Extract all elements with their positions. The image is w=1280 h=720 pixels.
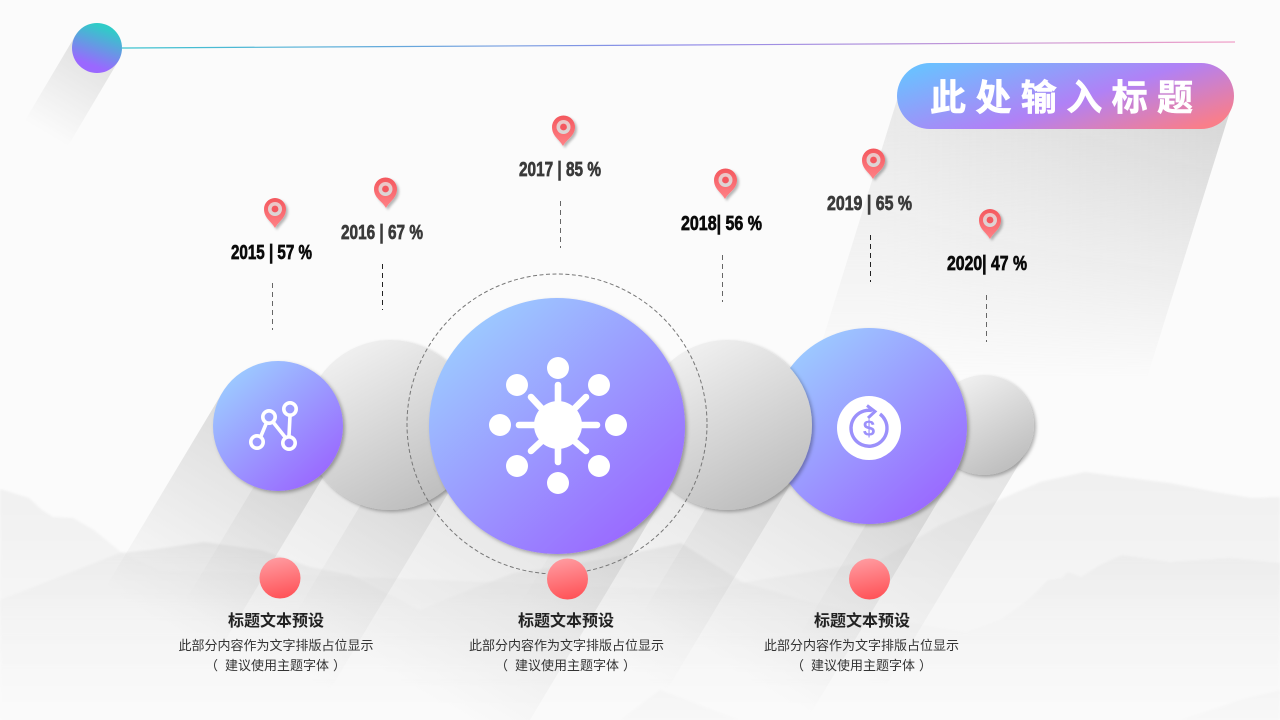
marker 2016 [341, 178, 423, 310]
caption block 2: 此部分内容作为文字排版占位显示 [469, 638, 664, 653]
marker 2019 [827, 148, 912, 282]
marker 2020: 2020| 47 % [947, 253, 1027, 275]
logo circle [72, 23, 122, 73]
caption block 1: （ 建议使用主题字体 ） [205, 658, 346, 673]
caption block 3: 此部分内容作为文字排版占位显示 [764, 638, 959, 653]
gray circle 2020 [934, 375, 1034, 475]
marker 2017 [519, 116, 601, 248]
caption block 1: 此部分内容作为文字排版占位显示 [178, 638, 374, 653]
marker 2016: 2016 | 67 % [341, 222, 423, 244]
marker 2018 [681, 168, 762, 302]
gray circle 2018 [642, 340, 812, 510]
circle 2019 with money icon [771, 328, 967, 524]
title pill: 此处输入标题 [930, 77, 1202, 118]
marker 2019: 2019 | 65 % [827, 193, 912, 215]
icon: dollar cycle [837, 396, 901, 460]
central circle 2017 with hub icon [429, 298, 685, 554]
caption block 3: 标题文本预设 [814, 611, 910, 630]
marker 2017: 2017 | 85 % [519, 159, 601, 181]
caption block 3: （ 建议使用主题字体 ） [791, 658, 932, 673]
marker 2015: 2015 | 57 % [231, 242, 312, 264]
dashed ring [407, 274, 707, 574]
icon: network graph [251, 403, 296, 449]
caption block 2 [469, 558, 664, 673]
circle 2015 with chart icon [213, 361, 343, 491]
marker 2018: 2018| 56 % [681, 213, 762, 235]
marker 2020 [947, 209, 1027, 342]
header line [122, 42, 1235, 48]
caption block 1 [178, 558, 374, 673]
title pill [897, 63, 1234, 129]
caption block 2: （ 建议使用主题字体 ） [495, 658, 636, 673]
marker 2015 [231, 198, 312, 330]
icon: dollar cycle: $ [863, 416, 875, 441]
caption block 3 [764, 558, 959, 673]
caption block 2: 标题文本预设 [518, 611, 614, 630]
icon: hub [489, 357, 627, 494]
caption block 1: 标题文本预设 [228, 611, 324, 630]
gray circle 2016 [305, 340, 475, 510]
